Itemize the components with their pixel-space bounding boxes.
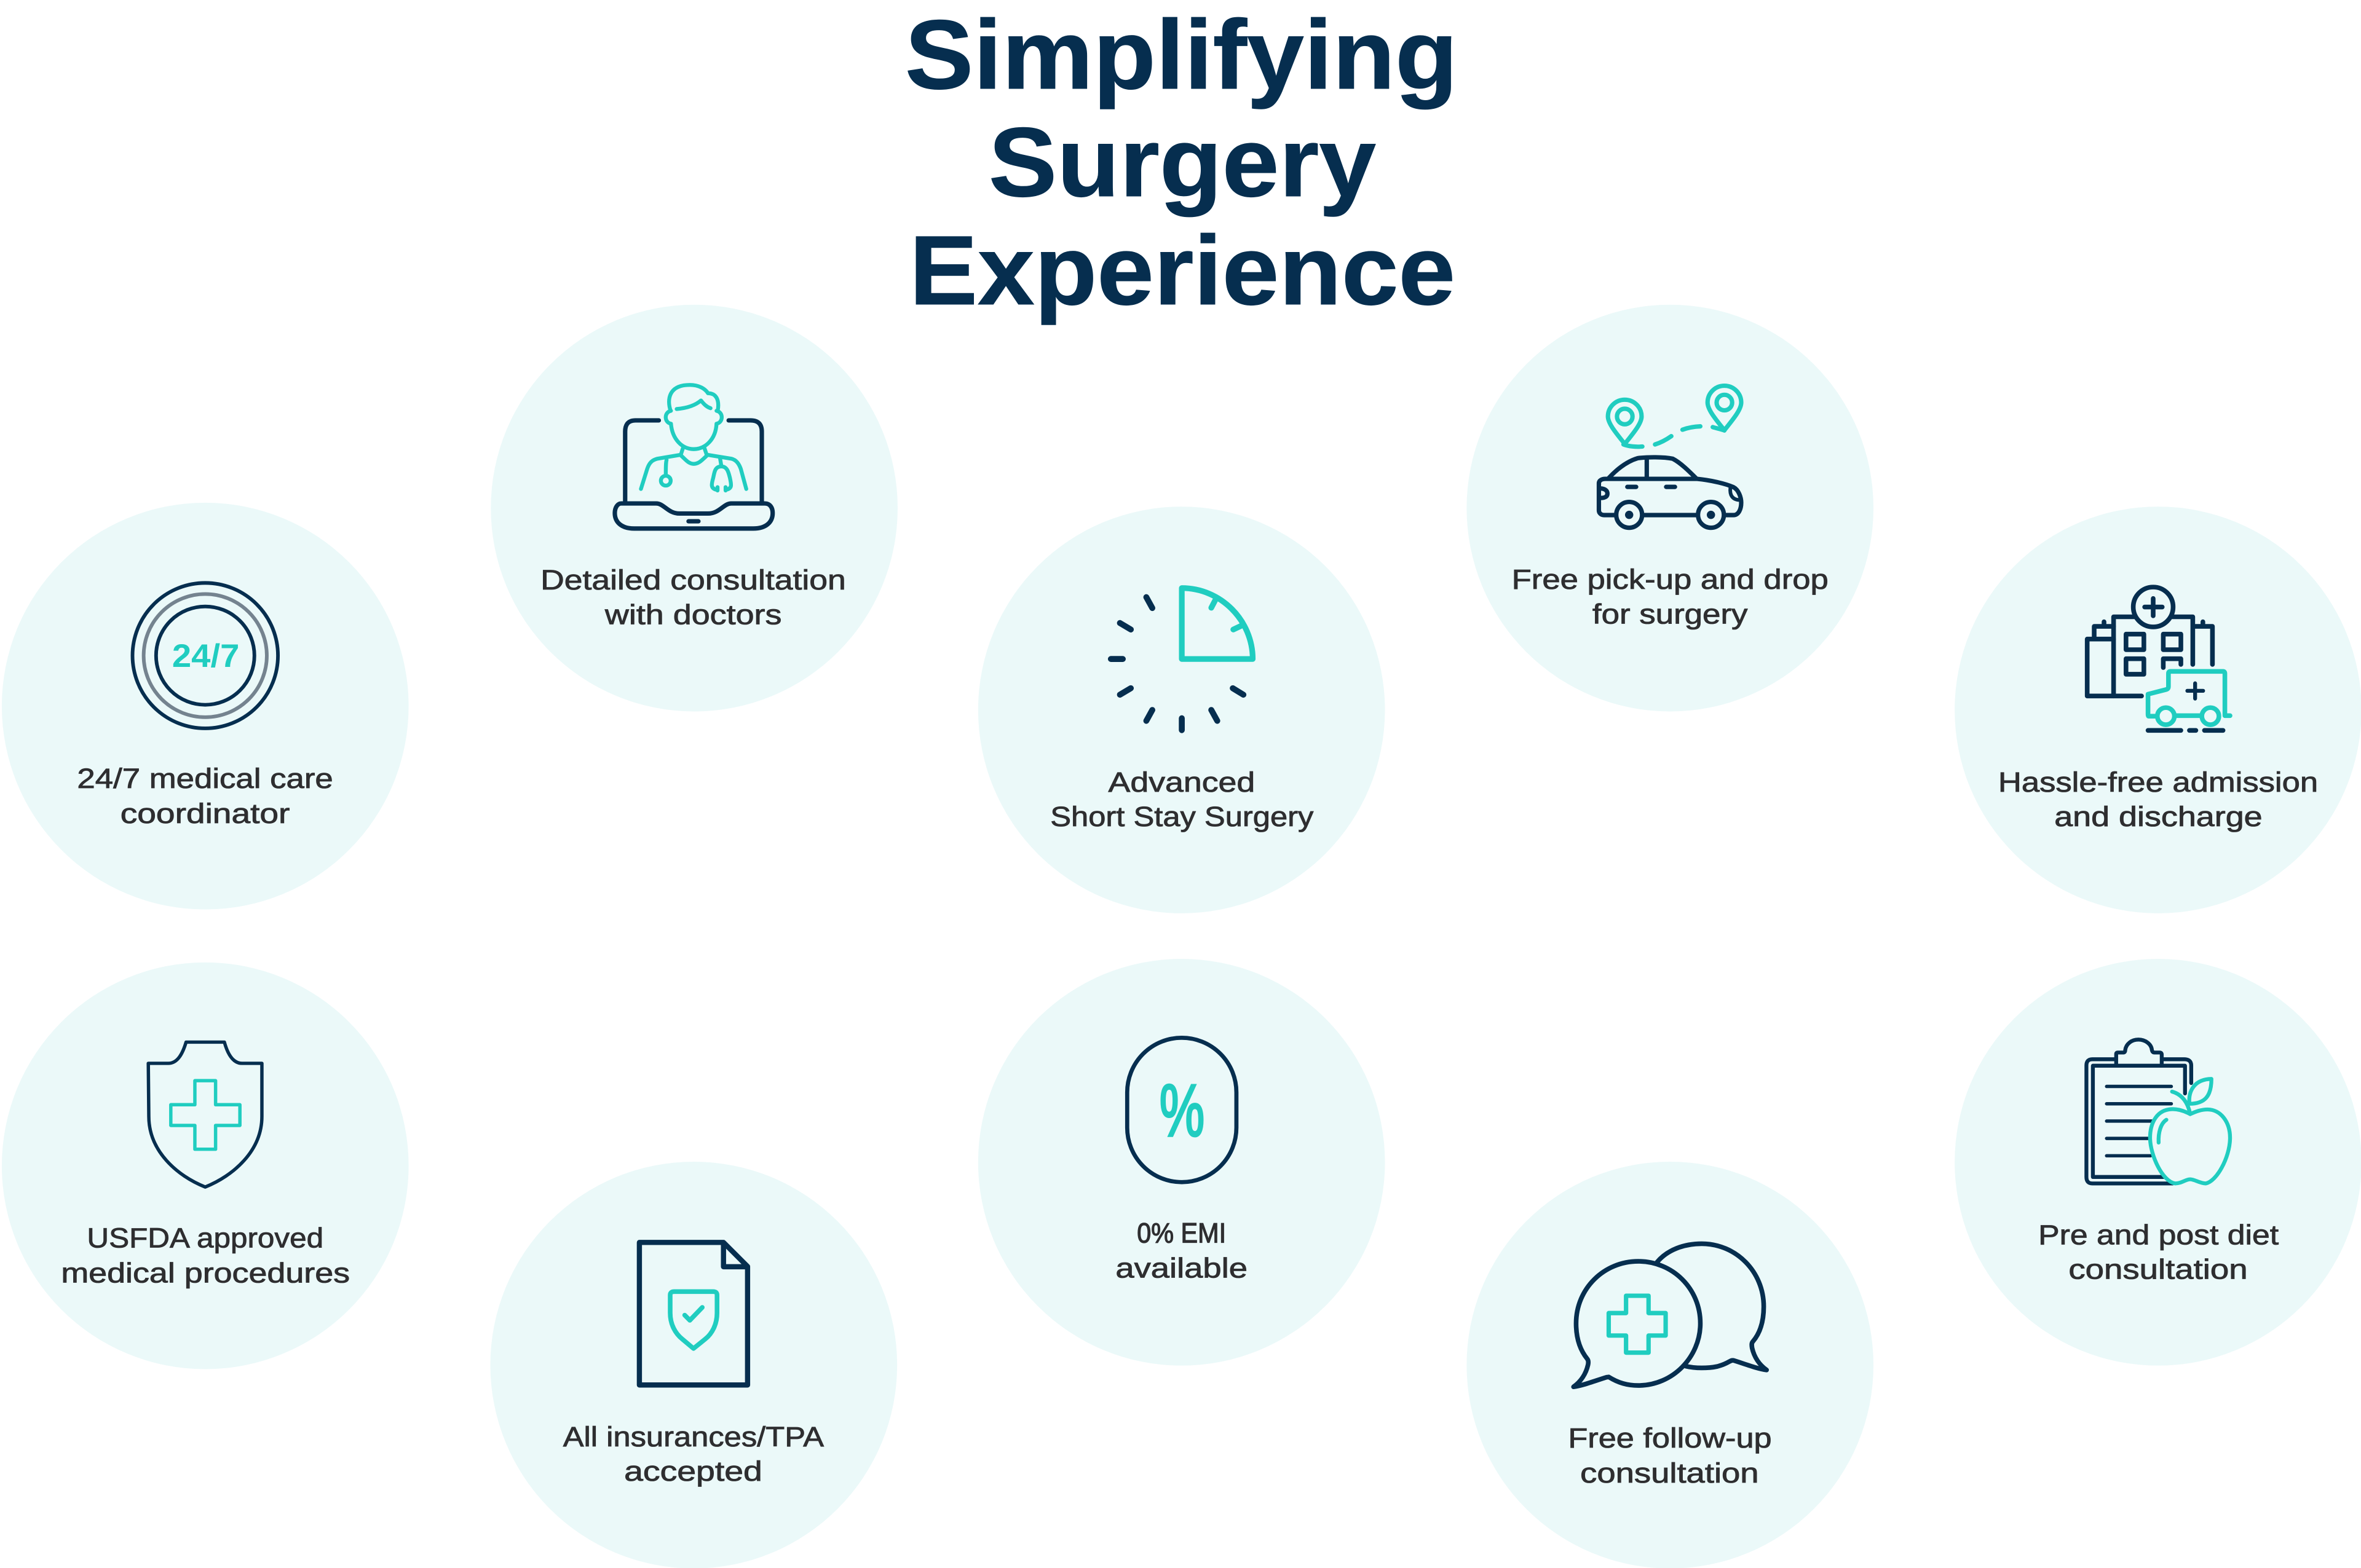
title: Experience xyxy=(909,215,1455,325)
label: USFDA approved xyxy=(87,1223,323,1254)
icon: percent capsule xyxy=(1127,1038,1236,1182)
icon: speech bubbles with cross xyxy=(1573,1243,1766,1387)
label: medical procedures xyxy=(61,1257,350,1288)
label xyxy=(1115,1218,1248,1284)
panel: pre and post diet consultation xyxy=(1955,959,2361,1366)
label: Advanced xyxy=(1109,766,1255,798)
label xyxy=(61,1223,350,1288)
label: 24/7 medical care xyxy=(77,763,333,794)
label: coordinator xyxy=(121,798,290,829)
icon: clipboard and apple xyxy=(2086,1039,2230,1183)
label: consultation xyxy=(1580,1457,1759,1489)
label xyxy=(77,763,333,829)
label: available xyxy=(1115,1253,1248,1284)
icon: document with shield xyxy=(639,1242,748,1385)
label xyxy=(1998,766,2318,832)
icon: hospital and ambulance xyxy=(2087,587,2230,730)
panel: 0% EMI available xyxy=(978,959,1385,1366)
label xyxy=(563,1421,824,1487)
icon: shield with cross xyxy=(148,1042,262,1187)
label: Free follow-up xyxy=(1568,1422,1772,1454)
title: Simplifying xyxy=(905,0,1458,109)
icon: quarter clock xyxy=(1111,588,1252,730)
label xyxy=(1050,766,1314,832)
panel: detailed consultation with doctors xyxy=(491,305,898,711)
icon: 24/7 rings: 24/7 xyxy=(172,638,239,674)
label: Pre and post diet xyxy=(2038,1219,2279,1250)
panel: USFDA approved medical procedures xyxy=(2,963,409,1369)
title xyxy=(905,0,1458,325)
label: All insurances/TPA xyxy=(563,1421,824,1452)
label: accepted xyxy=(624,1456,762,1487)
label: Free pick-up and drop xyxy=(1512,564,1829,595)
icon: percent capsule: % xyxy=(1160,1070,1204,1152)
label: consultation xyxy=(2068,1254,2248,1285)
label: and discharge xyxy=(2054,801,2263,832)
icon: car with location pins xyxy=(1599,386,1741,528)
panel: free follow-up consultation xyxy=(1466,1162,1873,1568)
icon: 24/7 rings xyxy=(133,583,278,728)
label: with doctors xyxy=(604,599,781,631)
label xyxy=(1512,564,1829,629)
label: Hassle-free admission xyxy=(1998,766,2318,798)
panel: 24/7 medical care coordinator xyxy=(2,503,409,910)
label: 0% EMI xyxy=(1137,1218,1226,1249)
title: Surgery xyxy=(989,107,1376,217)
label: for surgery xyxy=(1592,598,1748,629)
panel: all insurances accepted xyxy=(490,1162,897,1568)
label: Short Stay Surgery xyxy=(1050,801,1314,832)
panel: free pick-up and drop xyxy=(1466,305,1873,711)
label xyxy=(1568,1422,1772,1489)
panel: advanced short stay surgery xyxy=(978,506,1385,913)
panel: hassle-free admission and discharge xyxy=(1955,506,2361,913)
label xyxy=(2038,1219,2279,1285)
label: Detailed consultation xyxy=(540,564,846,596)
icon: doctor on laptop xyxy=(615,385,773,529)
label xyxy=(540,564,846,631)
